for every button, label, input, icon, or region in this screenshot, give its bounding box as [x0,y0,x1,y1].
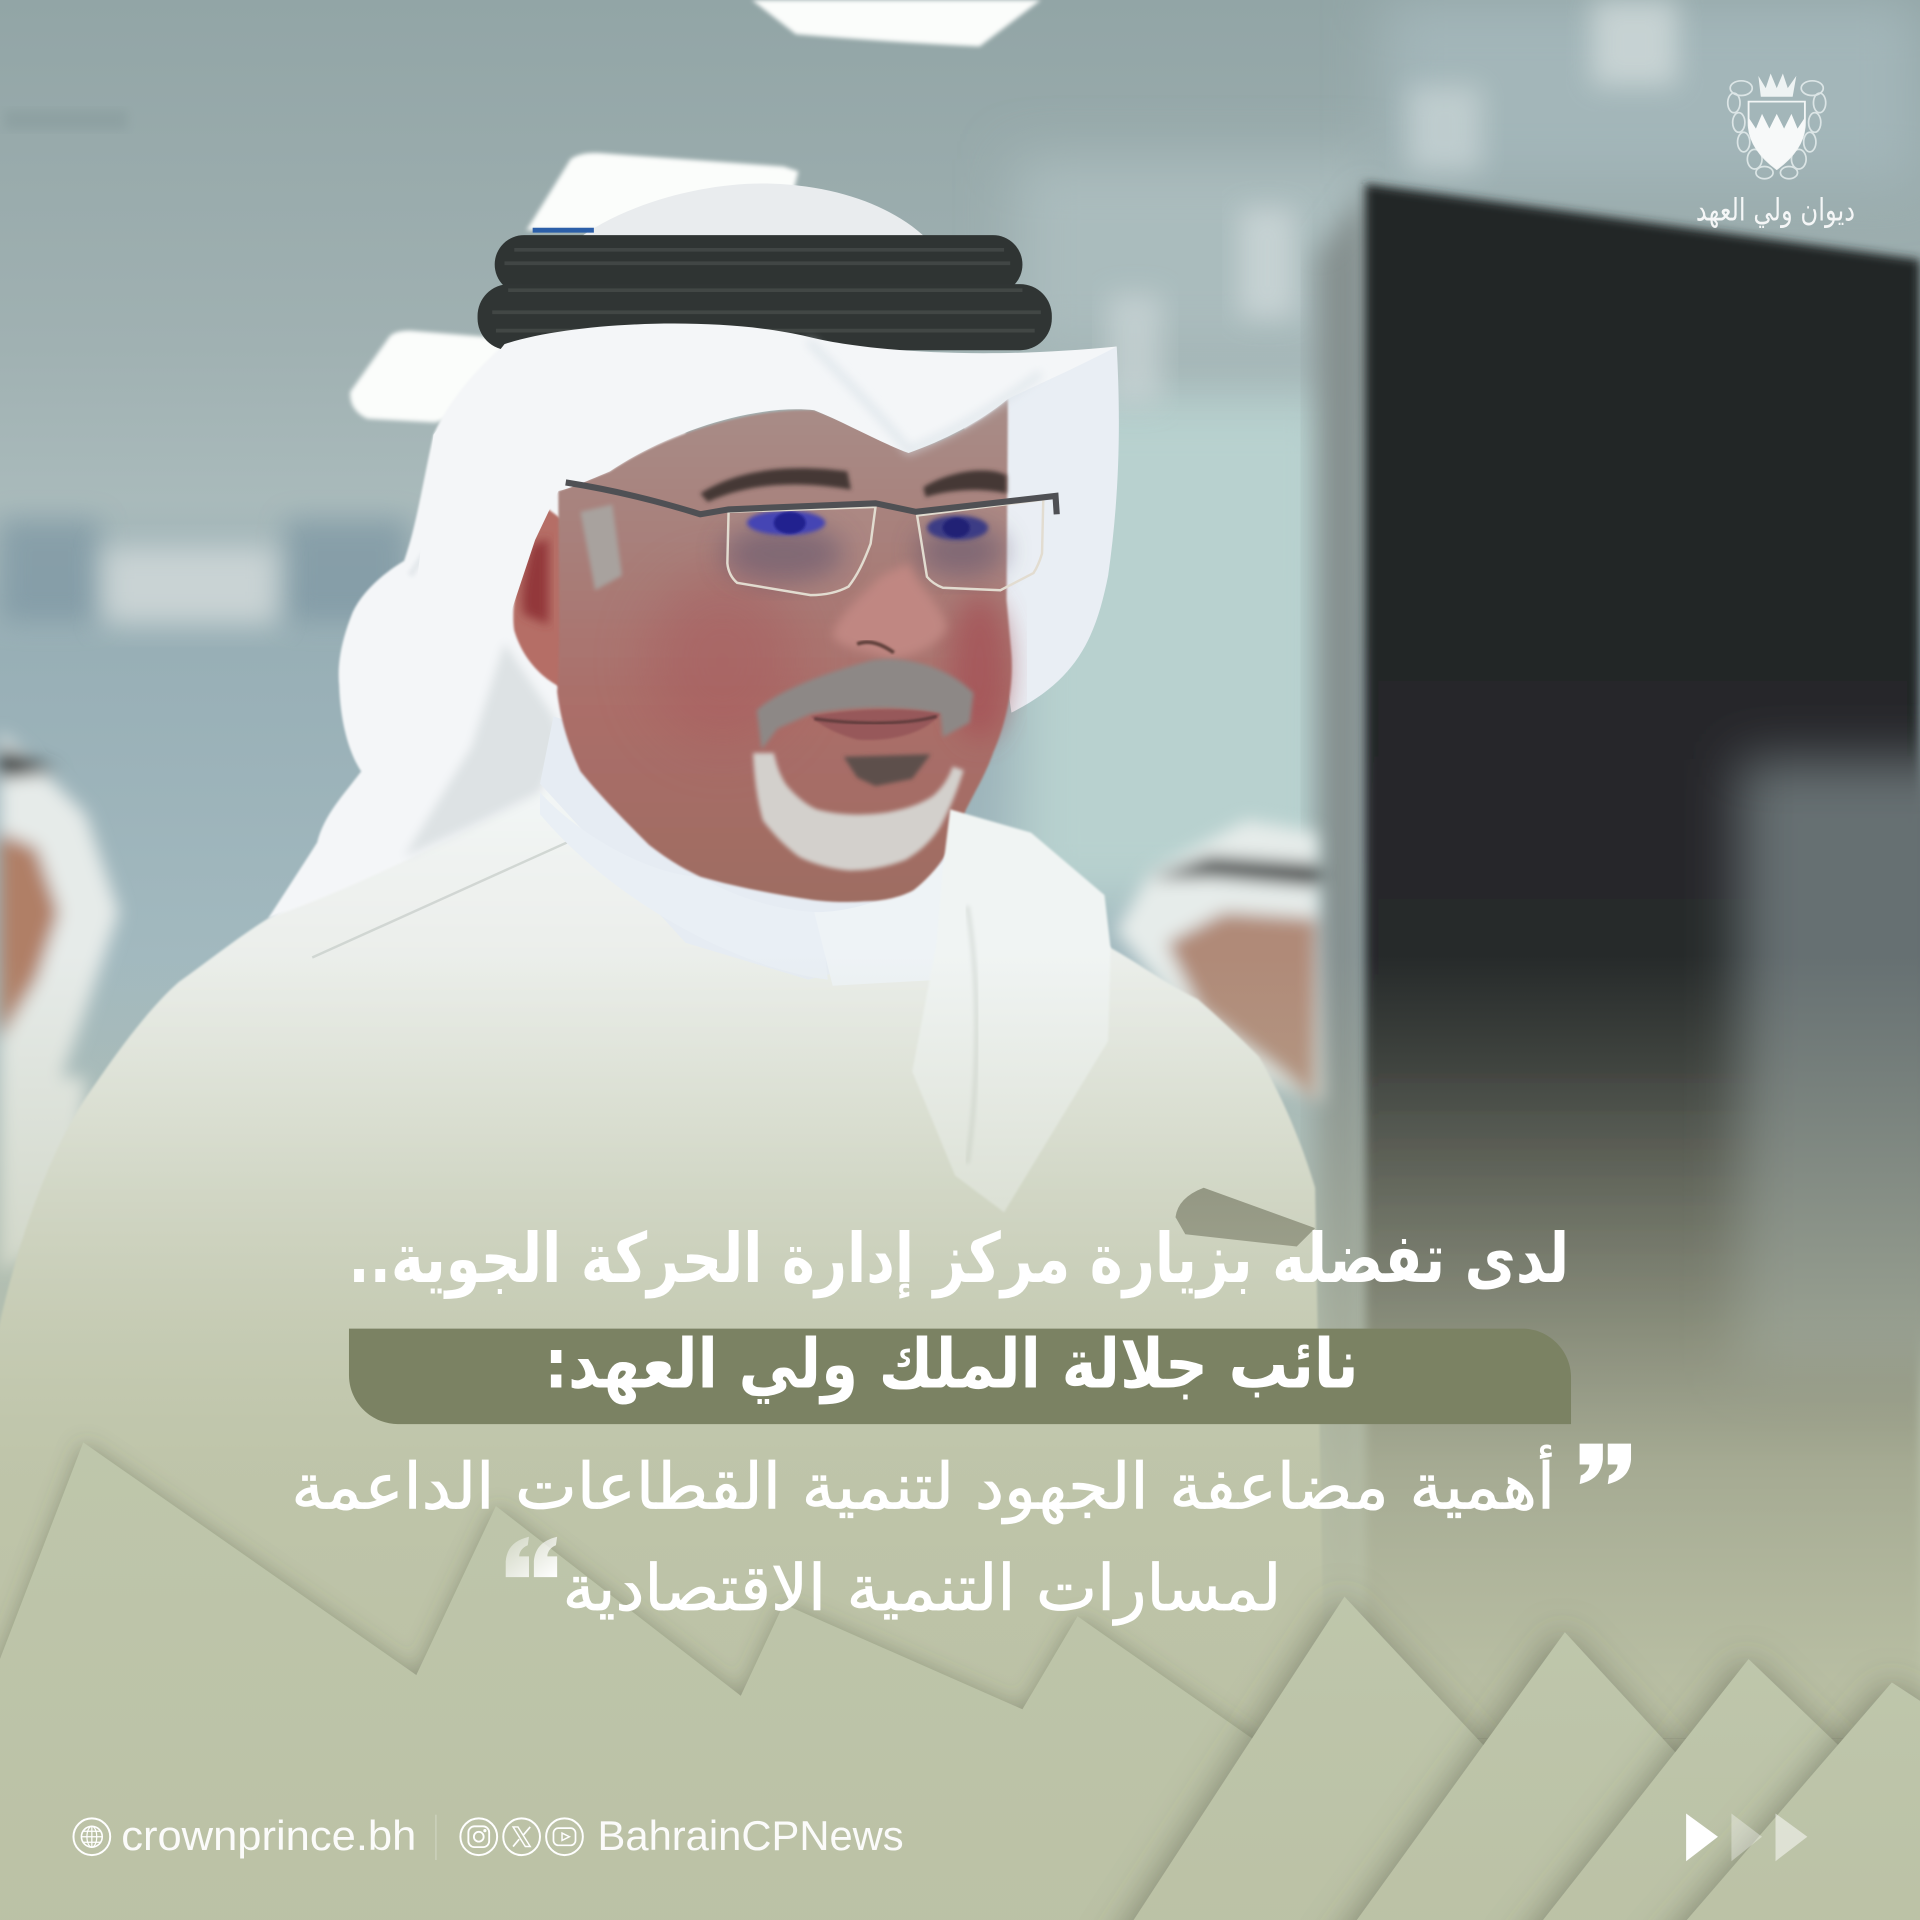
sideburn [580,504,622,590]
cheek redness [950,594,1009,741]
website: crownprince.bh [121,1812,416,1859]
ceiling lights [350,0,1041,422]
dark foreground panel on the right [1316,184,1920,1920]
eyes: blue reflections [747,511,825,535]
eyebrows [700,468,851,502]
ghutra textured shadow under ear [404,643,562,857]
ear [513,502,588,693]
portrait of the Crown Prince [0,183,1329,1920]
agal upper ring [495,235,1022,294]
icon: instagram [460,1818,497,1855]
icon: globe [73,1818,110,1855]
olive fade overlay [0,955,1920,1739]
angular mountain shapes [0,1442,1920,1920]
quote: لمسارات التنمية الاقتصادية [563,1552,1281,1626]
opening quote mark [506,1537,557,1577]
moustache [757,659,973,749]
glasses [727,500,1043,595]
name banner [349,1324,1571,1424]
pen in pocket [1176,1188,1315,1247]
name banner: نائب جلالة الملك ولي العهد: [544,1324,1359,1404]
footer: website and social handles [73,1812,904,1860]
quote [291,1444,1631,1626]
icon: youtube [546,1818,583,1855]
ghutra dome [573,183,931,263]
robe (thobe) [0,784,1329,1920]
emblem shield [1749,102,1805,169]
background person left [0,732,119,1273]
eye shadow [722,524,845,583]
blue sliver [533,228,594,233]
collar [540,792,828,980]
robe seam [312,842,567,958]
quote: أهمية مضاعفة الجهود لتنمية القطاعات الداعمة [291,1445,1555,1525]
scarf draped on the right [912,809,1111,1212]
emblem leaves wreath [1728,81,1826,179]
face [557,399,1012,902]
emblem caption: ديوان ولي العهد [1696,193,1855,228]
emblem crown [1758,73,1796,97]
neck and collar fill [540,716,967,980]
goatee [753,753,964,871]
headline: لدى تفضله بزيارة مركز إدارة الحركة الجوية.. [348,1219,1569,1299]
icon: x [503,1818,540,1855]
social handle: BahrainCPNews [598,1812,904,1859]
ghutra right side fold [955,347,1119,713]
nose [833,563,947,659]
ghutra folds [410,367,612,576]
ghutra front fold [416,324,1117,617]
ghutra back drape [268,344,686,918]
background person right [1117,820,1322,1102]
lips [811,710,940,740]
agal lower ring [478,284,1052,350]
crown prince's court emblem [1696,73,1855,228]
closing quote mark [1580,1444,1631,1484]
arrows: next page [1686,1813,1807,1861]
